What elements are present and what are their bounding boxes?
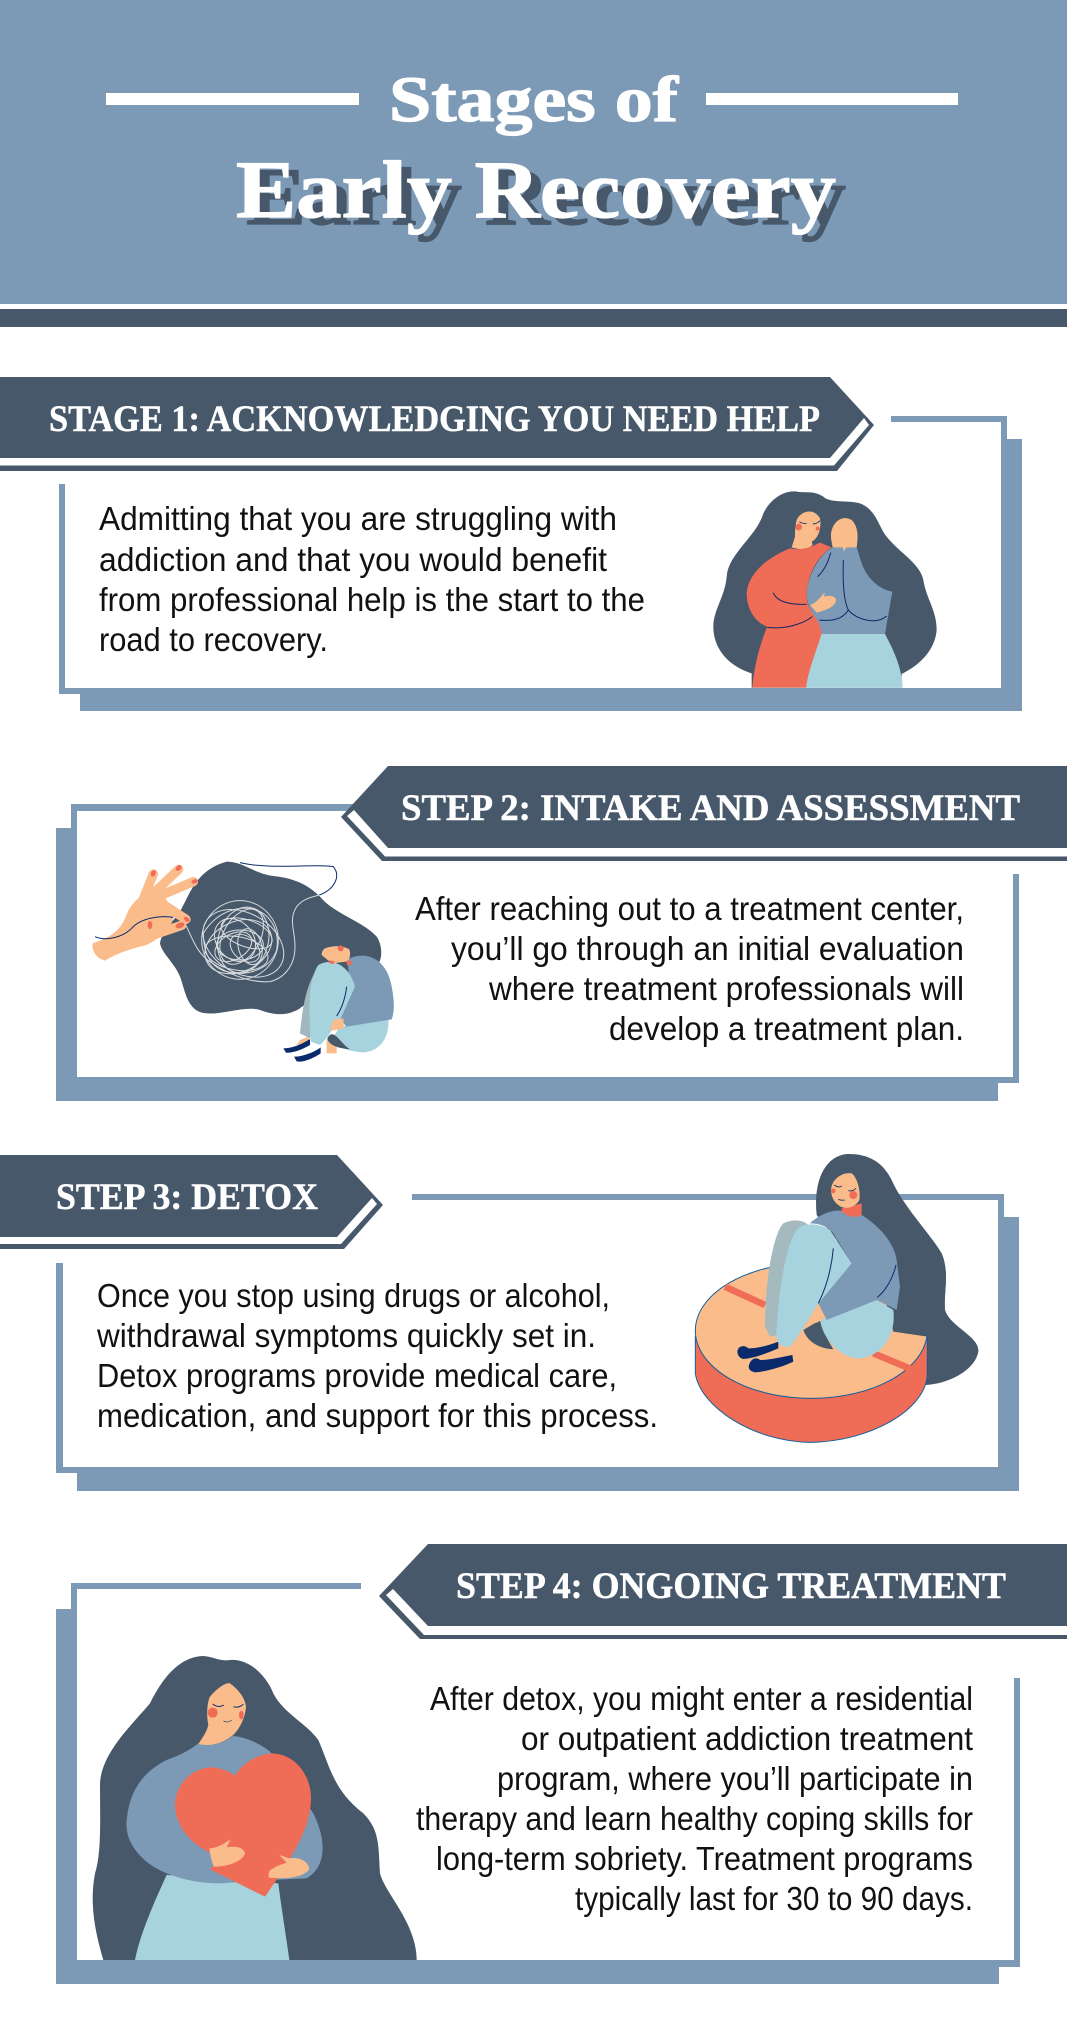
text block: step 3: medication, and support for this process. [97,1397,658,1434]
text block: step 4 [416,1680,973,1917]
text block: step 4: program, where you’ll participate in [497,1760,973,1797]
text block: stage 1: Admitting that you are struggling with [99,500,617,537]
text block: step 3: Detox programs provide medical care, [97,1357,617,1394]
heading ribbon: stage 1: STAGE 1: ACKNOWLEDGING YOU NEED HELP [49,399,820,440]
text block: stage 1: addiction and that you would benefit [99,541,607,578]
title: Early Recovery [236,144,836,235]
text block: step 3 [96,1277,658,1434]
panel: step 2 [56,766,1067,1101]
heading ribbon: step 4: STEP 4: ONGOING TREATMENT [456,1566,1006,1607]
text block: stage 1: from professional help is the start to the [99,581,645,618]
text block: step 2: where treatment professionals will [488,970,964,1007]
text block: step 2: After reaching out to a treatment center, [415,890,964,927]
illustration: woman hugging a heart [93,1656,417,1960]
panel: step 3 [0,1154,1019,1491]
heading ribbon: step 3 [0,1155,383,1249]
panel: step 4 [56,1544,1067,1984]
text block: step 4: or outpatient addiction treatment [521,1720,973,1757]
text block: step 2: develop a treatment plan. [609,1010,964,1047]
text block: step 3: withdrawal symptoms quickly set in. [96,1317,596,1354]
text block: step 3: Once you stop using drugs or alcohol, [97,1277,610,1314]
title: Early Recovery [246,151,846,242]
illustration: two women embracing [713,491,937,688]
heading ribbon: step 2 [341,766,1067,861]
text block: step 2 [415,890,964,1047]
text block: step 4: typically last for 30 to 90 days. [575,1880,973,1917]
text block: step 2: you’ll go through an initial evaluation [451,930,964,967]
text block: step 4: After detox, you might enter a residential [430,1680,973,1717]
text block: step 4: long-term sobriety. Treatment programs [436,1840,973,1877]
title [236,64,846,242]
illustration: woman sitting on a pill [695,1154,978,1442]
panel: stage 1 [0,377,1022,711]
title: Stages of [389,64,680,136]
text block: step 4: therapy and learn healthy coping skills for [416,1800,973,1837]
heading ribbon: step 4 [379,1544,1067,1639]
heading ribbon: step 2: STEP 2: INTAKE AND ASSESSMENT [401,788,1020,829]
heading ribbon: step 3: STEP 3: DETOX [56,1177,318,1218]
text block: stage 1: road to recovery. [99,621,328,658]
heading ribbon: stage 1 [0,377,874,471]
illustration: hand untangling thread from seated figure [93,862,394,1062]
text block: stage 1 [99,500,645,658]
header banner [0,0,1067,327]
